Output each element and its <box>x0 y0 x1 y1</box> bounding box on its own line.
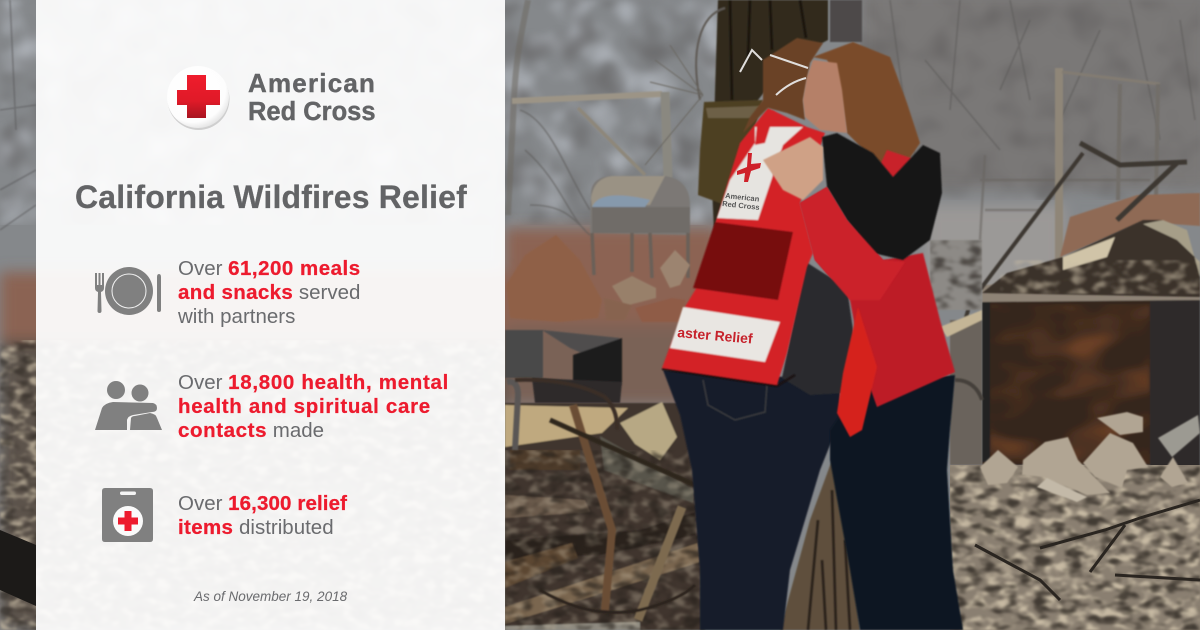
stat: meals and snacks <box>178 257 361 328</box>
icon: plate with fork and knife <box>95 267 161 315</box>
barrel smoker grill <box>590 176 690 278</box>
stat: health and care contacts: Over 18,800 health, mental <box>178 371 449 394</box>
stat: relief items: Over 16,300 relief <box>178 492 347 515</box>
figure: hair of volunteer <box>743 38 823 133</box>
figure: volunteer in jeans <box>663 370 840 630</box>
dark crate and ground left <box>505 330 622 403</box>
debris texture left <box>505 450 705 630</box>
bare trees and fence <box>0 0 1195 240</box>
plaster shards on stove front <box>980 412 1200 502</box>
figure: black sleeve hugging <box>822 133 942 260</box>
logo wordmark: American <box>248 68 376 98</box>
figure: woman in jeans <box>830 375 963 630</box>
American Red Cross logo <box>168 68 376 130</box>
figure: woman's red sleeve <box>800 187 905 300</box>
vest logo and wording: aster Relief <box>677 324 754 347</box>
stat: health and care contacts: contacts made <box>178 419 324 442</box>
stat: health and care contacts: health and spiritual care <box>178 395 431 418</box>
figure: mask strap and hair clip <box>740 50 808 95</box>
sky mottling <box>0 0 1200 225</box>
vest logo and wording: Red Cross <box>722 199 760 212</box>
collapsed roof debris right <box>930 143 1200 465</box>
white translucent panel <box>36 0 505 630</box>
figure: woman's hair <box>813 42 920 177</box>
rusty posts and curved tubes left <box>507 380 695 620</box>
stat: health and care contacts <box>178 371 449 442</box>
metal frame <box>512 68 1160 260</box>
figure: woman's face <box>803 60 847 133</box>
icon: red cross button <box>167 66 230 130</box>
figure: woman's red jacket <box>800 187 955 407</box>
tree trunk <box>645 0 862 630</box>
rocks on the ground <box>506 235 690 322</box>
title: California Wildfires Relief <box>75 179 467 215</box>
pale boards and burned logs left <box>505 402 705 630</box>
figure: red vest with panels <box>662 108 877 437</box>
logo wordmark: Red Cross <box>248 98 376 126</box>
stat: meals and snacks: with partners <box>178 305 295 328</box>
icon: first aid kit <box>102 488 153 542</box>
stat: meals and snacks: Over 61,200 meals <box>178 257 361 280</box>
figure: dark undershirt <box>782 262 862 395</box>
vest logo and wording: American <box>725 191 760 204</box>
stat: relief items: items distributed <box>178 516 334 539</box>
logo wordmark <box>248 68 376 126</box>
debris pile right <box>950 465 1200 630</box>
tarp behind right side <box>1060 193 1200 257</box>
figure: clasped hand <box>763 137 823 200</box>
rusty metal stove <box>982 280 1200 467</box>
stat: meals and snacks: and snacks served <box>178 281 360 304</box>
date note: As of November 19, 2018 <box>194 589 347 604</box>
vest logo and wording <box>677 153 761 347</box>
figure: red shoulder <box>880 150 917 183</box>
stat: relief items <box>178 492 348 539</box>
debris texture left strip <box>0 340 505 630</box>
icon: two people embracing <box>95 381 162 430</box>
